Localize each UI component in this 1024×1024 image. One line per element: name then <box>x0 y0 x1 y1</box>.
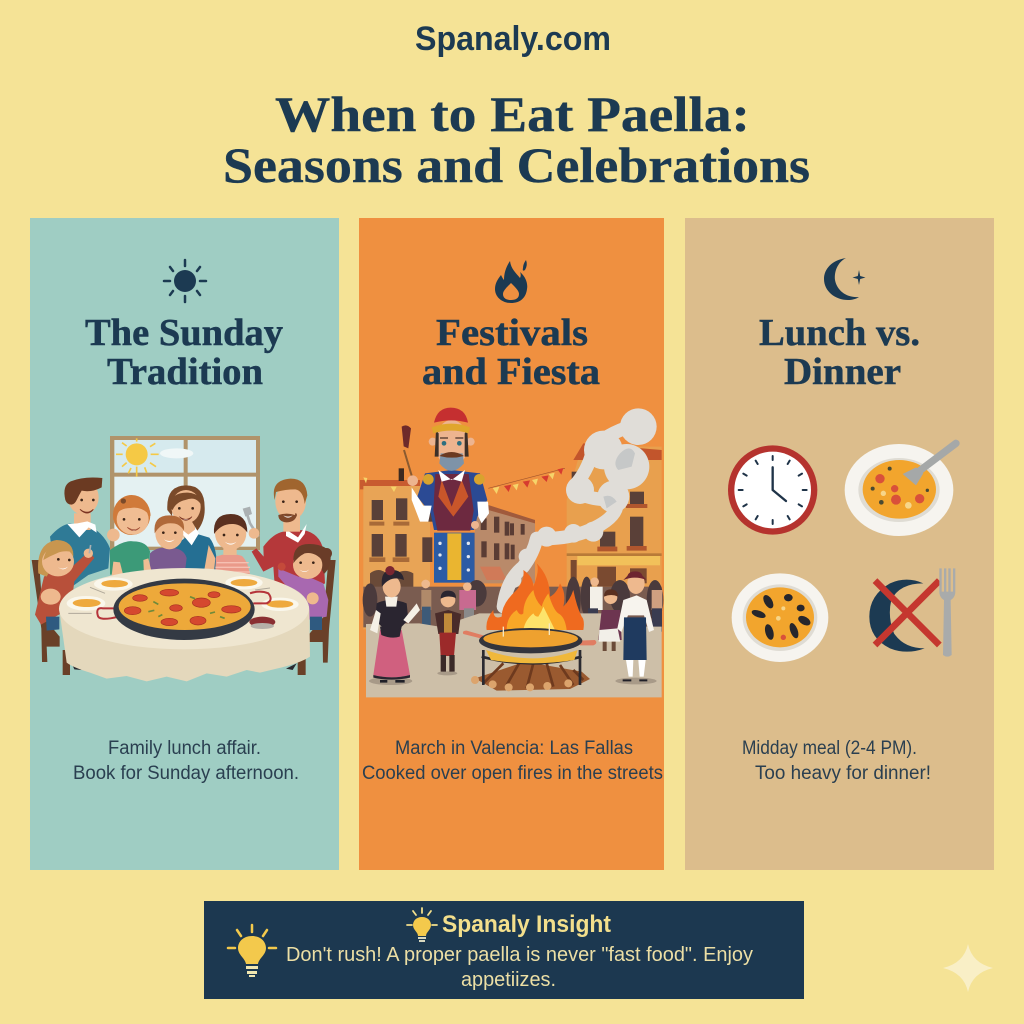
girl in apron <box>598 589 622 651</box>
body text <box>73 738 299 784</box>
bonfire <box>463 563 596 691</box>
heading: Lunch vs. <box>759 312 920 354</box>
site name: Spanaly.com <box>415 20 611 58</box>
title <box>223 86 810 193</box>
body text: Midday meal (2-4 PM). <box>742 738 917 759</box>
heading <box>85 312 283 393</box>
body text <box>362 738 663 784</box>
heading: Tradition <box>107 351 263 393</box>
panel: festivals and fiesta <box>359 218 664 870</box>
icon: crescent moon <box>824 258 866 300</box>
callout text <box>286 943 754 991</box>
giant figure <box>399 408 489 583</box>
icon: small light bulb <box>407 908 437 942</box>
icon: clock <box>728 445 817 535</box>
body text: March in Valencia: Las Fallas <box>395 738 633 759</box>
title: Seasons and Celebrations <box>223 137 810 193</box>
panel: lunch vs dinner <box>685 218 994 870</box>
body text: Too heavy for dinner! <box>755 763 931 784</box>
heading <box>422 312 600 393</box>
heading: and Fiesta <box>422 351 600 393</box>
crowd <box>363 577 663 632</box>
heading: The Sunday <box>85 312 283 354</box>
callout heading: Spanaly Insight <box>442 911 611 938</box>
icon: flame <box>495 260 527 303</box>
icon: sun <box>164 260 206 302</box>
heading: Dinner <box>784 351 901 393</box>
icon: sparkle <box>943 944 993 992</box>
icon: paella plate with spoon <box>845 443 956 536</box>
woman in navy apron <box>615 571 657 684</box>
boy in red <box>435 591 461 675</box>
woman in pink dress <box>369 566 420 685</box>
panel: the sunday tradition <box>30 218 339 870</box>
icon: large light bulb <box>228 925 276 977</box>
title: When to Eat Paella: <box>275 86 750 142</box>
body text: Book for Sunday afternoon. <box>73 763 299 784</box>
illustration: las fallas street scene <box>360 408 663 697</box>
callout text: Don't rush! A proper paella is never "fast food". Enjoy <box>286 943 754 966</box>
icon group: lunch and dinner symbols <box>728 443 956 662</box>
heading: Festivals <box>436 312 588 354</box>
icon: crossed-out moon and fork <box>869 568 955 657</box>
body text: Cooked over open fires in the streets <box>362 763 663 784</box>
illustration: family around paella table <box>32 436 336 681</box>
body text <box>742 738 931 784</box>
body text: Family lunch affair. <box>108 738 261 759</box>
callout: spanaly insight <box>204 901 804 999</box>
callout text: appetiizes. <box>461 968 556 991</box>
icon: mussel paella plate <box>732 573 828 662</box>
smoke <box>503 408 657 607</box>
heading <box>759 312 920 393</box>
